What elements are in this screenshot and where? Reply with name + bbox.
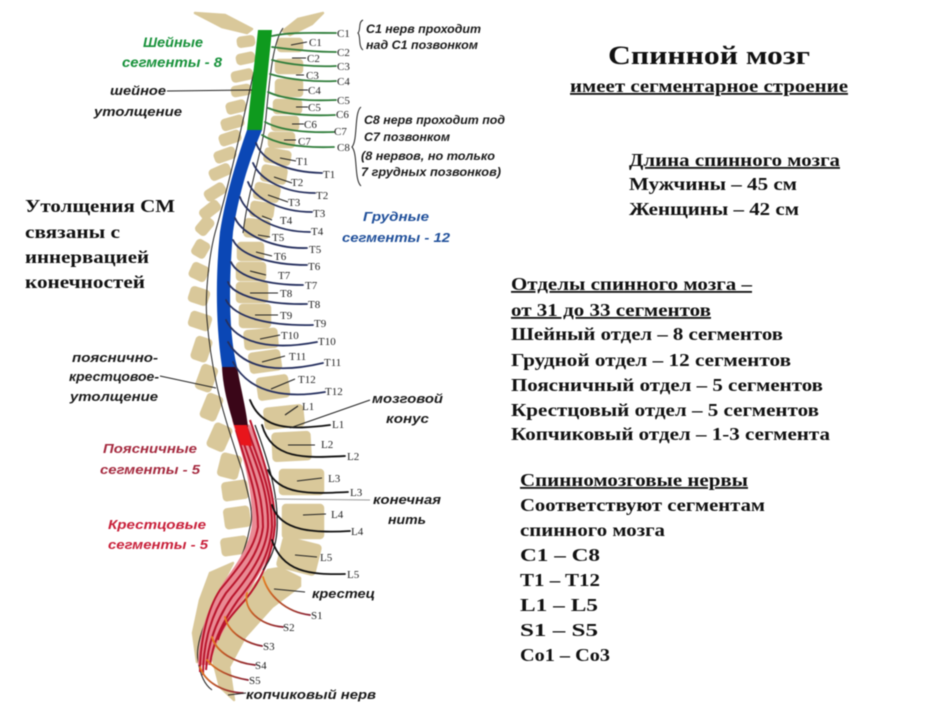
text: spinal nerves: T1 – T12 — [520, 570, 600, 590]
note: C1 nerve: над C1 позвонком — [366, 38, 478, 52]
nerve labels: C8 — [337, 142, 350, 154]
text: cord length: Женщины – 42 см — [629, 199, 799, 219]
nerve labels: S1 — [311, 610, 323, 622]
nerve labels: C5 — [337, 95, 350, 107]
text: cord divisions: Крестцовый отдел – 5 сегментов — [511, 400, 819, 420]
label: lumbosacral enlargement — [69, 350, 159, 404]
nerve labels: L2 — [321, 439, 333, 451]
nerve labels: C7 — [298, 136, 311, 148]
label: lumbar segments: Поясничные — [103, 441, 197, 456]
nerve labels: C5 — [308, 102, 321, 114]
text: spinal nerves: L1 – L5 — [520, 595, 598, 615]
spine diagram — [160, 13, 370, 700]
label: conus: мозговой — [372, 391, 443, 406]
label: sacral segments — [108, 517, 209, 552]
nerve labels: T9 — [280, 310, 293, 322]
spinal cord bundle — [198, 420, 277, 675]
text: cord length — [629, 150, 840, 219]
label: sacral segments: Крестцовые — [108, 517, 206, 532]
note: C8 nerve: (8 нервов, но только — [361, 149, 495, 163]
text: spinal nerves: C1 – C8 — [520, 545, 600, 565]
cervical segment (green) — [247, 30, 272, 130]
nerve labels: T3 — [313, 208, 326, 220]
nerve labels: C3 — [337, 61, 350, 73]
label: thoracic segments: Грудные — [363, 209, 429, 224]
nerve labels: L1 — [332, 419, 344, 431]
sacral nerves — [200, 577, 310, 693]
thoracic segment (blue) — [217, 130, 262, 367]
label: conus — [372, 391, 443, 426]
nerve labels: C6 — [336, 109, 349, 121]
thoracic nerves — [226, 143, 325, 394]
label: cervical enlargement: шейное — [110, 83, 166, 98]
nerve labels: L1 — [302, 401, 314, 413]
label: lumbar segments — [100, 441, 201, 477]
label: thoracic segments — [342, 209, 451, 245]
dura lines — [198, 28, 283, 690]
label: lumbosacral enlargement: пояснично- — [72, 350, 158, 365]
subtitle: имеет сегментарное строение — [570, 76, 848, 96]
label: sacrum: крестец — [312, 586, 375, 601]
label: conus: конус — [386, 411, 430, 426]
note: C1 nerve — [358, 20, 481, 52]
nerve labels: C4 — [308, 85, 321, 97]
nerve labels: T8 — [308, 299, 321, 311]
nerve labels: C1 — [309, 37, 322, 49]
text: cord divisions — [511, 274, 830, 444]
nerve labels: L5 — [347, 569, 360, 581]
nerve labels: T6 — [308, 261, 321, 273]
nerve labels: T5 — [309, 244, 322, 256]
nerve labels: T12 — [298, 374, 316, 386]
label: cervical enlargement — [93, 83, 182, 119]
label: cervical enlargement: утолщение — [93, 104, 182, 119]
nerve labels: T1 — [323, 169, 335, 181]
text: enlargements note: связаны с — [25, 222, 120, 242]
nerve labels: C1 — [337, 28, 350, 40]
pointer lines — [160, 90, 370, 695]
nerve labels: T5 — [272, 232, 285, 244]
text: cord divisions: Копчиковый отдел – 1-3 сегмента — [511, 424, 830, 444]
nerve labels: L4 — [331, 509, 344, 521]
text: enlargements note: Утолщения СМ — [25, 196, 175, 216]
text: spinal nerves: Спинномозговые нервы — [520, 470, 748, 490]
note: C8 nerve: 7 грудных позвонков) — [361, 165, 501, 179]
text: enlargements note: конечностей — [25, 272, 145, 292]
text: spinal nerves: Соответствуют сегментам — [520, 495, 765, 515]
label: lumbosacral enlargement: крестцовое- — [69, 369, 159, 384]
note: C8 nerve: C8 нерв проходит под — [364, 113, 505, 127]
inner segment leader lines — [250, 42, 326, 557]
nerve labels: C4 — [337, 76, 350, 88]
nerve labels: S3 — [263, 641, 275, 653]
text: cord divisions: Шейный отдел – 8 сегментов — [511, 324, 783, 344]
nerve labels: T6 — [274, 251, 287, 263]
nerve labels: T4 — [280, 215, 293, 227]
nerve labels: C7 — [334, 126, 347, 138]
text: spinal nerves: Co1 – Co3 — [520, 645, 610, 665]
text: cord length: Длина спинного мозга — [629, 150, 840, 170]
nerve labels: S2 — [283, 622, 295, 634]
label: filum terminale — [373, 492, 441, 527]
label: cervical segments: Шейные — [143, 35, 204, 50]
nerve labels: C2 — [307, 53, 320, 65]
note: C8 nerve — [352, 107, 505, 186]
label: lumbar segments: сегменты - 5 — [100, 462, 201, 477]
nerve labels: L5 — [320, 552, 333, 564]
title: Спинной мозг — [608, 41, 810, 70]
nerve labels: T3 — [288, 197, 301, 209]
nerve labels: L3 — [350, 487, 363, 499]
text: enlargements note: иннервацией — [25, 247, 149, 267]
text: enlargements note — [25, 196, 175, 292]
label: filum terminale: конечная — [373, 492, 441, 507]
note: C1 nerve: C1 нерв проходит — [366, 22, 481, 36]
text: spinal nerves: спинного мозга — [520, 520, 665, 540]
nerve labels: T10 — [281, 330, 299, 342]
nerve labels: T8 — [280, 288, 293, 300]
nerve labels: T2 — [316, 190, 328, 202]
text: spinal nerves — [520, 470, 765, 665]
label: lumbosacral enlargement: утолщение — [69, 389, 158, 404]
text: spinal nerves: S1 – S5 — [520, 620, 598, 640]
sacrum — [193, 563, 300, 700]
nerve labels: T11 — [324, 357, 341, 369]
text: cord divisions: Отделы спинного мозга – — [511, 274, 753, 294]
nerve labels — [249, 28, 364, 687]
label: coccygeal nerve: копчиковый нерв — [246, 687, 376, 702]
text: cord divisions: Поясничный отдел – 5 сегментов — [511, 375, 823, 395]
nerve labels: L3 — [328, 473, 341, 485]
nerve labels: S5 — [249, 675, 261, 687]
label: filum terminale: нить — [388, 512, 426, 527]
nerve labels: C2 — [337, 47, 350, 59]
text: cord divisions: Грудной отдел – 12 сегментов — [511, 350, 791, 370]
cervical nerves — [262, 33, 336, 147]
label: sacral segments: сегменты - 5 — [108, 537, 209, 552]
label: cervical segments — [122, 35, 223, 70]
nerve labels: T12 — [325, 386, 343, 398]
vertebrae: left processes — [188, 13, 323, 556]
nerve labels: L4 — [351, 526, 364, 538]
nerve labels: T2 — [291, 177, 303, 189]
nerve labels: C3 — [306, 70, 319, 82]
label: thoracic segments: сегменты - 12 — [342, 230, 451, 245]
vertebrae: right bodies — [237, 39, 323, 575]
text: cord divisions: от 31 до 33 сегментов — [511, 300, 711, 320]
nerve labels: T10 — [318, 336, 336, 348]
nerve labels: S4 — [255, 660, 267, 672]
nerve labels: T4 — [311, 226, 324, 238]
note: C8 nerve: C7 позвонком — [364, 130, 450, 144]
nerve labels: C6 — [304, 119, 317, 131]
nerve labels: T11 — [289, 351, 306, 363]
label: cervical segments: сегменты - 8 — [122, 55, 223, 70]
nerve labels: T9 — [314, 318, 327, 330]
nerve labels: L2 — [347, 451, 359, 463]
text: cord length: Мужчины – 45 см — [629, 174, 797, 194]
lumbar segment (red) — [234, 425, 252, 446]
lumbar nerves — [250, 400, 350, 574]
nerve labels: T7 — [278, 270, 291, 282]
nerve labels: T1 — [296, 156, 308, 168]
nerve labels: T7 — [305, 280, 318, 292]
lumbosacral enlargement (dark) — [222, 367, 248, 427]
